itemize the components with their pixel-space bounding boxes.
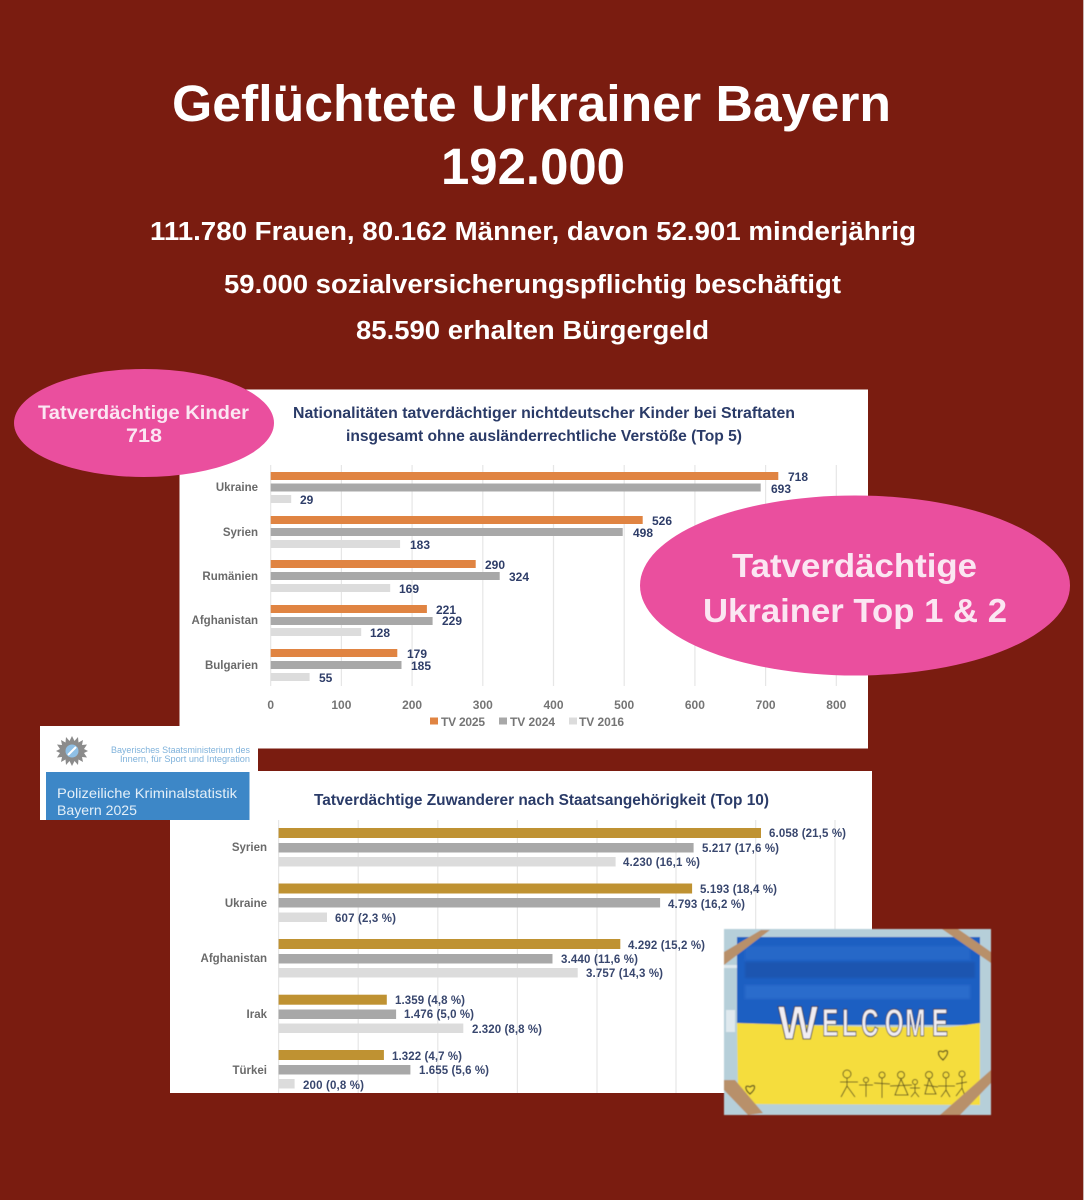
group: Ukraine: 29 <box>300 493 314 507</box>
group: Afghanistan: 221 <box>436 603 456 617</box>
callout: Tatverdächtige Kinder: 718 <box>126 426 162 447</box>
group: Ukraine: 718 <box>788 470 808 484</box>
group: Afghanistan: 4.292 (15,2 %) <box>628 940 705 952</box>
group: Afghanistan: Afghanistan <box>201 953 267 965</box>
painting lettering: ELCOME <box>822 1001 948 1044</box>
group: Ukraine <box>225 884 777 925</box>
group: Bulgarien <box>205 647 431 685</box>
text: ministry <box>111 745 251 764</box>
group: Ukraine: Ukraine <box>225 898 267 910</box>
group: Rumänien: Rumänien <box>202 571 258 583</box>
title: Geflüchtete Urkrainer Bayern <box>172 75 891 132</box>
callout: Tatverdächtige Kinder: Tatverdächtige Kinder <box>38 403 250 424</box>
text: Bürgergeld: 85.590 erhalten Bürgergeld <box>356 317 709 345</box>
group: Syrien: Syrien <box>232 842 267 854</box>
x axis labels: 100 <box>331 698 352 712</box>
group: Rumänien <box>202 558 529 596</box>
group: Ukraine: 693 <box>771 482 791 496</box>
x axis labels: 300 <box>473 698 493 712</box>
group: Afghanistan: 128 <box>370 626 390 640</box>
group: Türkei: 1.655 (5,6 %) <box>419 1065 489 1077</box>
group: Syrien: 4.230 (16,1 %) <box>623 857 700 869</box>
group: Irak: Irak <box>247 1009 268 1021</box>
group: Türkei <box>232 1050 489 1092</box>
title: 192.000 <box>441 138 625 195</box>
stick figures <box>840 1070 967 1098</box>
group: Afghanistan: 229 <box>442 614 462 628</box>
group: Syrien: 183 <box>410 538 430 552</box>
group: Syrien <box>232 828 846 869</box>
tape corners <box>724 929 991 1115</box>
callout: Tatverdächtige Ukrainer: Ukrainer Top 1 & 2 <box>703 592 1007 629</box>
group: Rumänien: 324 <box>509 570 529 584</box>
group: Ukraine: 607 (2,3 %) <box>335 913 396 925</box>
hearts <box>746 1051 948 1094</box>
group: Rumänien: 169 <box>399 582 419 596</box>
x axis labels: 0 <box>267 698 274 712</box>
chart title: Nationalitäten tatverdächtiger nichtdeutscher Kinder bei Straftaten <box>293 405 795 422</box>
x axis labels: 800 <box>826 698 847 712</box>
group: Afghanistan <box>192 603 462 640</box>
group: Syrien: Syrien <box>223 527 258 539</box>
text: report title: Bayern 2025 <box>57 802 137 818</box>
group: Irak <box>247 995 542 1036</box>
group: Türkei: Türkei <box>232 1065 267 1077</box>
group: Bulgarien: 55 <box>319 671 333 685</box>
x axis labels: 500 <box>614 698 635 712</box>
legend: TV 2016 <box>579 715 624 729</box>
group: Bulgarien: 179 <box>407 647 427 661</box>
title <box>172 75 891 195</box>
group: Syrien: 6.058 (21,5 %) <box>769 828 846 840</box>
x axis labels: 200 <box>402 698 422 712</box>
group: Afghanistan: 3.440 (11,6 %) <box>561 954 638 966</box>
group: Ukraine: Ukraine <box>216 482 258 494</box>
group: Bulgarien: 185 <box>411 659 431 673</box>
text: ministry: Bayerisches Staatsministerium des <box>111 745 251 755</box>
group: Rumänien: 290 <box>485 558 505 572</box>
group: Bulgarien: Bulgarien <box>205 660 258 672</box>
group: Irak: 1.476 (5,0 %) <box>404 1009 474 1021</box>
text: demographics: 111.780 Frauen, 80.162 Männer, davon 52.901 minderjährig <box>150 218 916 246</box>
group: Irak: 1.359 (4,8 %) <box>395 995 465 1007</box>
painting lettering <box>778 998 948 1050</box>
x axis labels <box>267 698 847 712</box>
panel: bar chart children by nationality <box>180 390 868 748</box>
chart title <box>293 405 795 445</box>
panel: bar chart suspects by citizenship <box>170 771 872 1093</box>
group: Syrien <box>223 514 672 552</box>
text: report title: Polizeiliche Kriminalstatistik <box>57 785 238 801</box>
group: Syrien: 5.217 (17,6 %) <box>702 843 779 855</box>
x axis labels: 700 <box>756 698 776 712</box>
chart title: Tatverdächtige Zuwanderer nach Staatsangehörigkeit (Top 10) <box>314 792 769 809</box>
legend: TV 2025 <box>441 715 485 729</box>
photo: Welcome painting <box>724 929 991 1115</box>
callout: Tatverdächtige Kinder <box>14 369 274 477</box>
group: Ukraine: 5.193 (18,4 %) <box>700 884 777 896</box>
x axis labels: 600 <box>685 698 705 712</box>
text: ministry: Innern, für Sport und Integration <box>120 754 250 764</box>
text: report title <box>57 785 238 818</box>
group: Afghanistan: Afghanistan <box>192 615 258 627</box>
x axis labels: 400 <box>543 698 564 712</box>
group: Türkei: 1.322 (4,7 %) <box>392 1051 462 1063</box>
group: Irak: 2.320 (8,8 %) <box>472 1024 542 1036</box>
group: Afghanistan: 3.757 (14,3 %) <box>586 968 663 980</box>
group: Türkei: 200 (0,8 %) <box>303 1080 364 1092</box>
callout: Tatverdächtige Ukrainer: Tatverdächtige <box>732 547 977 584</box>
text: employment: 59.000 sozialversicherungspflichtig beschäftigt <box>224 271 842 299</box>
group: Afghanistan <box>201 939 705 980</box>
callout: Tatverdächtige Ukrainer <box>640 496 1070 676</box>
group: Syrien: 498 <box>633 526 653 540</box>
logo card: Polizeiliche Kriminalstatistik <box>40 726 258 820</box>
legend: TV 2024 <box>510 715 555 729</box>
chart title: insgesamt ohne ausländerrechtliche Verstöße (Top 5) <box>346 428 742 445</box>
group: Ukraine <box>216 470 808 507</box>
group: Syrien: 526 <box>652 514 672 528</box>
legend <box>430 715 624 729</box>
painting lettering: W <box>778 998 819 1050</box>
icon: police star <box>56 736 88 766</box>
group: Ukraine: 4.793 (16,2 %) <box>668 899 745 911</box>
